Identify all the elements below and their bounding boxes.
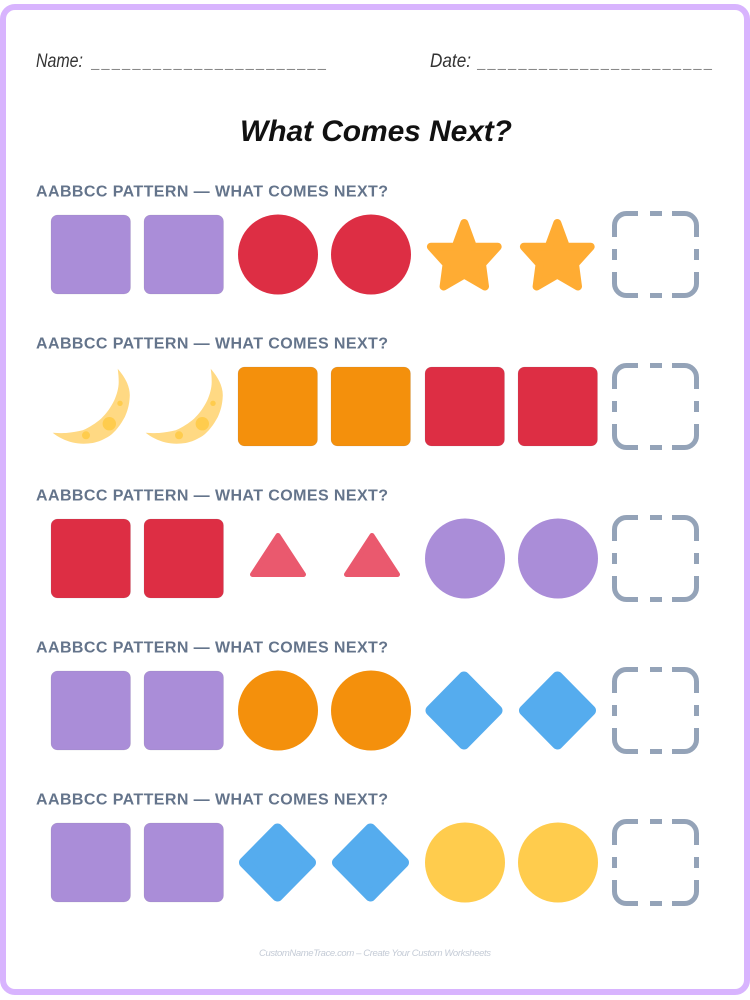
title: What Comes Next? [240, 115, 512, 148]
row 5 answer box [614, 822, 696, 904]
date field [430, 51, 713, 73]
row 5 heading: AABBCC PATTERN — WHAT COMES NEXT? [36, 792, 388, 808]
row 1 [36, 184, 696, 296]
row 3 shapes [51, 518, 598, 598]
row 4 heading: AABBCC PATTERN — WHAT COMES NEXT? [36, 640, 388, 656]
row 1 shapes [51, 214, 591, 294]
name field: _______________________ [90, 57, 327, 73]
row 2 [36, 336, 696, 448]
row 3 heading: AABBCC PATTERN — WHAT COMES NEXT? [36, 488, 388, 504]
row 2 shapes [53, 367, 597, 446]
row 1 heading: AABBCC PATTERN — WHAT COMES NEXT? [36, 184, 388, 200]
row 2 heading: AABBCC PATTERN — WHAT COMES NEXT? [36, 336, 388, 352]
row 5 [36, 792, 696, 904]
date field: _______________________ [476, 57, 713, 73]
name field: Name: [36, 51, 83, 72]
row 4 shapes [51, 670, 590, 750]
name field [36, 51, 327, 73]
footer: CustomNameTrace.com – Create Your Custom Worksheets [259, 948, 491, 959]
row 5 shapes [51, 822, 598, 902]
row 3 answer box [614, 518, 696, 600]
row 3 [36, 488, 696, 600]
row 4 answer box [614, 670, 696, 752]
row 4 [36, 640, 696, 752]
row 1 answer box [614, 214, 696, 296]
row 2 answer box [614, 366, 696, 448]
date field: Date: [430, 51, 471, 72]
